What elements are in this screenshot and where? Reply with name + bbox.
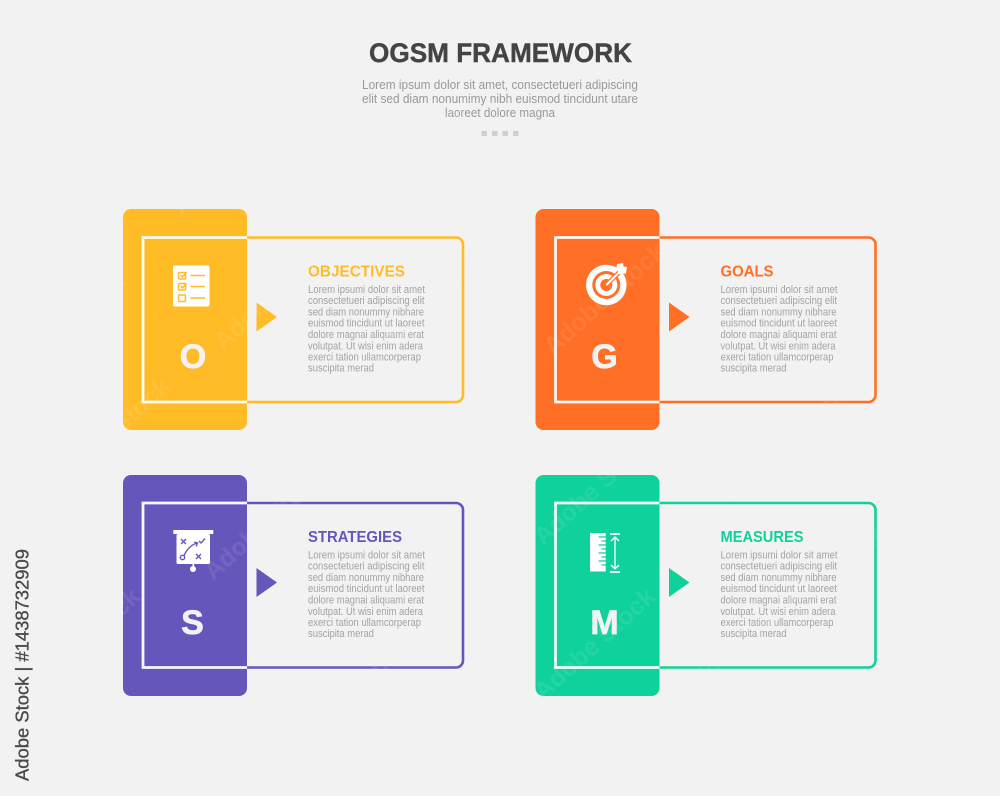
body text: sed diam nonummy nibhare bbox=[720, 572, 837, 584]
watermark pattern: Adobe Stock bbox=[829, 104, 961, 228]
heading: goals: GOALS bbox=[720, 264, 774, 280]
watermark pattern: Adobe Stock bbox=[664, 277, 796, 401]
body text: sed diam nonummy nibhare bbox=[720, 306, 837, 318]
watermark pattern: Adobe Stock bbox=[501, 104, 633, 228]
heading: strategies: STRATEGIES bbox=[308, 529, 402, 546]
body text bbox=[720, 550, 838, 640]
body text: dolore magnai aliquami erat bbox=[308, 594, 424, 606]
watermark pattern: Adobe Stock bbox=[14, 582, 146, 706]
panel: goals bbox=[536, 209, 876, 430]
body text: exerci tation ullamcorperap bbox=[308, 617, 421, 629]
title: OGSM FRAMEWORK bbox=[369, 38, 632, 68]
watermark pattern: Adobe Stock bbox=[839, 447, 971, 571]
body text: consectetueri adipiscing elit bbox=[720, 295, 837, 307]
icon: ruler and height arrow bbox=[590, 533, 620, 572]
body text: suscipita merad bbox=[308, 628, 374, 640]
arrow bbox=[669, 302, 690, 332]
watermark pattern: Adobe Stock bbox=[44, 372, 176, 496]
arrow bbox=[669, 568, 690, 597]
body text: euismod tincidunt ut laoreet bbox=[720, 583, 837, 595]
body text: euismod tincidunt ut laoreet bbox=[308, 318, 425, 330]
body text: dolore magnai aliquami erat bbox=[308, 329, 424, 341]
watermark pattern: Adobe Stock bbox=[167, 97, 299, 221]
panel: objectives bbox=[123, 209, 463, 430]
watermark pattern: Adobe Stock bbox=[39, 44, 171, 168]
body text: sed diam nonummy nibhare bbox=[308, 306, 424, 318]
body text: exerci tation ullamcorperap bbox=[308, 352, 421, 364]
watermark pattern: Adobe Stock bbox=[529, 427, 661, 551]
watermark pattern: Adobe Stock bbox=[0, 267, 131, 391]
body text: suscipita merad bbox=[308, 363, 374, 375]
panel: strategies bbox=[123, 475, 463, 696]
heading: objectives: OBJECTIVES bbox=[308, 264, 405, 280]
heading: measures: MEASURES bbox=[720, 529, 804, 546]
body text: Lorem ipsumi dolor sit amet bbox=[720, 284, 838, 296]
body text: euismod tincidunt ut laoreet bbox=[308, 583, 425, 595]
body text: volutpat. Ut wisi enim adera bbox=[720, 340, 836, 352]
body text bbox=[308, 550, 425, 640]
body text: consectetueri adipiscing elit bbox=[308, 295, 425, 307]
body text: exerci tation ullamcorperap bbox=[720, 352, 834, 364]
body text: dolore magnai aliquami erat bbox=[720, 594, 837, 606]
watermark pattern: Adobe Stock bbox=[334, 267, 466, 391]
body text: suscipita merad bbox=[720, 628, 787, 640]
icon: strategy board bbox=[173, 530, 213, 572]
watermark pattern: Adobe Stock bbox=[209, 232, 341, 356]
body text: volutpat. Ut wisi enim adera bbox=[720, 606, 836, 618]
body text: suscipita merad bbox=[720, 363, 787, 375]
arrow bbox=[256, 568, 277, 597]
title dots bbox=[482, 131, 518, 136]
body text: volutpat. Ut wisi enim adera bbox=[308, 606, 423, 618]
body text bbox=[308, 284, 425, 375]
body text: consectetueri adipiscing elit bbox=[720, 561, 837, 573]
subtitle text block bbox=[362, 78, 638, 120]
side stock label: Adobe Stock | #1438732909 bbox=[12, 549, 32, 781]
letter M: M bbox=[590, 604, 619, 642]
watermark pattern: Adobe Stock bbox=[701, 72, 833, 196]
arrow bbox=[256, 302, 277, 332]
body text: Lorem ipsumi dolor sit amet bbox=[308, 550, 425, 562]
body text: consectetueri adipiscing elit bbox=[308, 561, 425, 573]
watermark pattern: Adobe Stock bbox=[329, 592, 461, 716]
body text: dolore magnai aliquami erat bbox=[720, 329, 837, 341]
body text: Lorem ipsumi dolor sit amet bbox=[308, 284, 425, 296]
body text: euismod tincidunt ut laoreet bbox=[720, 318, 837, 330]
watermark pattern: Adobe Stock bbox=[674, 582, 806, 706]
subtitle text block: laoreet dolore magna bbox=[445, 106, 555, 120]
letter O: O bbox=[180, 338, 206, 376]
watermark pattern: Adobe Stock bbox=[529, 582, 661, 706]
watermark pattern: Adobe Stock bbox=[539, 237, 671, 361]
watermark pattern: Adobe Stock bbox=[199, 462, 331, 586]
body text: exerci tation ullamcorperap bbox=[720, 617, 834, 629]
panel: measures bbox=[536, 475, 876, 696]
subtitle text block: Lorem ipsum dolor sit amet, consectetueri adipiscing bbox=[362, 78, 638, 92]
letter G: G bbox=[591, 338, 618, 376]
subtitle text block: elit sed diam nonumimy nibh euismod tincidunt utare bbox=[362, 92, 638, 106]
body text bbox=[720, 284, 838, 375]
body text: sed diam nonummy nibhare bbox=[308, 572, 424, 584]
icon: target bbox=[586, 263, 627, 305]
letter S: S bbox=[181, 604, 204, 642]
watermark pattern: Adobe Stock bbox=[379, 377, 511, 501]
icon: checklist bbox=[173, 266, 210, 306]
watermark pattern: Adobe Stock bbox=[349, 84, 481, 208]
body text: volutpat. Ut wisi enim adera bbox=[308, 340, 423, 352]
watermark pattern: Adobe Stock bbox=[719, 382, 851, 506]
body text: Lorem ipsumi dolor sit amet bbox=[720, 550, 838, 562]
